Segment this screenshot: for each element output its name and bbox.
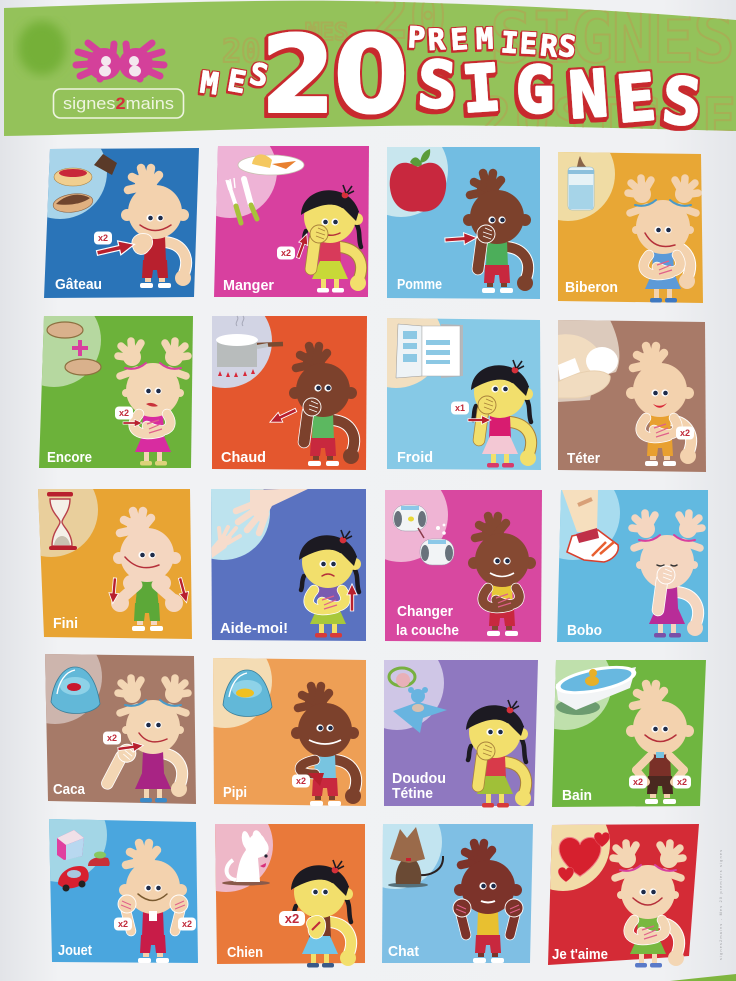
count: x2 [680,428,690,438]
character [466,700,531,808]
character [118,341,188,466]
label: Pomme [397,276,442,293]
panel: Chien [215,824,365,968]
character [468,516,536,636]
label: Tétine [392,785,433,802]
arrow and count [115,406,142,427]
logo label: signes2mains [63,94,174,113]
icon: nursing [558,334,618,398]
label: Fini [53,615,78,632]
panel: Chaud [212,316,367,470]
panel: Pomme [387,147,540,299]
label: la couche [396,622,459,639]
character [626,346,696,466]
ghost title: MES [305,18,348,46]
character [118,843,188,963]
icon: baby bottle [568,156,594,210]
ghost title [223,1,734,131]
panel: Je t'aime [548,824,699,968]
panel: Biberon [558,152,703,303]
arrow and count: x2 [119,408,129,418]
character [289,346,359,466]
character [291,860,356,968]
ghost title: 2OSIGNE [478,87,736,152]
character [632,513,703,638]
title: PREMIERS [407,20,578,64]
icon: hearts [558,832,610,882]
label: Bain [562,787,592,804]
icon: pacifier and comforter [389,668,447,733]
character [463,173,533,293]
icon: leg with shoe [562,490,618,562]
character [121,168,191,288]
panel: Bobo [557,490,708,642]
character [471,360,536,468]
label [392,770,446,802]
arrow and count [94,232,136,260]
label: Encore [47,449,92,466]
icon: open fridge [396,324,463,378]
icon: dog [222,829,270,886]
icon: hourglass [47,492,77,550]
panel: Changer la couche [385,490,542,642]
label: Changer [397,603,453,620]
character [301,185,366,292]
panel: Pipi [213,658,366,806]
count: x2 [285,911,299,926]
arrow [445,232,477,246]
label: Pipi [223,784,247,801]
panel: Fini [38,489,192,639]
arrow and count [103,732,144,754]
panel: Chat [382,824,533,963]
panel: Bain [552,660,706,807]
label: Caca [53,781,86,798]
arrow and count [292,773,324,788]
character [628,178,698,302]
arrow and count: x1 [455,403,465,413]
arrow and count [451,402,491,424]
label: Froid [397,449,433,466]
label: Manger [223,277,274,294]
count: x2 [633,777,643,787]
label: Bobo [567,622,602,639]
character [111,511,183,631]
character [299,530,361,638]
label: Jouet [58,942,92,959]
character [626,684,694,804]
icon: plate and cutlery [226,154,304,223]
arrows [108,577,191,604]
icon: potty [223,670,272,716]
label: Aide-moi! [220,620,288,637]
icon: pot on flame [216,316,283,377]
banner [4,0,736,136]
count [676,426,694,440]
icon: potty [51,667,100,714]
character [106,678,188,802]
panel: Doudou Tétine [384,660,538,808]
panel: Aide-moi [211,489,366,641]
fine print credits: signes2mains - Mes 20 premiers signes [719,850,723,960]
panel: Manger [214,146,369,297]
icon: toys [57,830,110,892]
character [453,843,523,963]
count [279,911,305,926]
label: Chaud [221,449,266,466]
arrow and count: x2 [281,248,291,258]
count: x2 [118,919,128,929]
count: x2 [677,777,687,787]
arrow [347,584,357,611]
arrow and count: x2 [98,233,108,243]
panel: Jouet [49,819,198,963]
bottom-right green strip [670,974,736,981]
panel: Froid [387,318,541,470]
label: Chat [388,943,419,960]
label: Chien [227,944,263,961]
icon: apple [390,149,446,212]
label: Doudou [392,770,446,787]
title: SIGNES [416,48,704,141]
arrow and count: x2 [107,733,117,743]
character [613,843,684,968]
label: Gâteau [55,276,102,293]
arrow and count [277,232,311,260]
icon: cakes [52,154,117,215]
label: Je t'aime [552,946,608,963]
title [198,14,704,141]
icon: biscuits [47,322,101,375]
count [114,918,196,930]
icon: bath tub and duck [556,666,636,715]
label: Téter [567,450,600,467]
icon: cat [388,827,443,888]
panel: Téter [558,320,706,472]
count: x2 [182,919,192,929]
icon: helping hands [211,488,310,558]
count [629,776,691,788]
panel: Caca [45,654,196,804]
label [396,603,459,639]
logo hands [76,43,164,80]
icon: diapers [393,505,454,565]
title: MES [198,57,271,102]
title: 20 [261,14,408,138]
character [291,686,361,806]
logo: signes2mains [54,43,184,118]
panel: Gâteau [44,148,199,298]
label: Biberon [565,279,618,296]
ghost title: 20 [222,32,261,70]
panel: Encore [39,316,193,468]
arrow [268,405,298,427]
arrow and count: x2 [296,776,306,786]
